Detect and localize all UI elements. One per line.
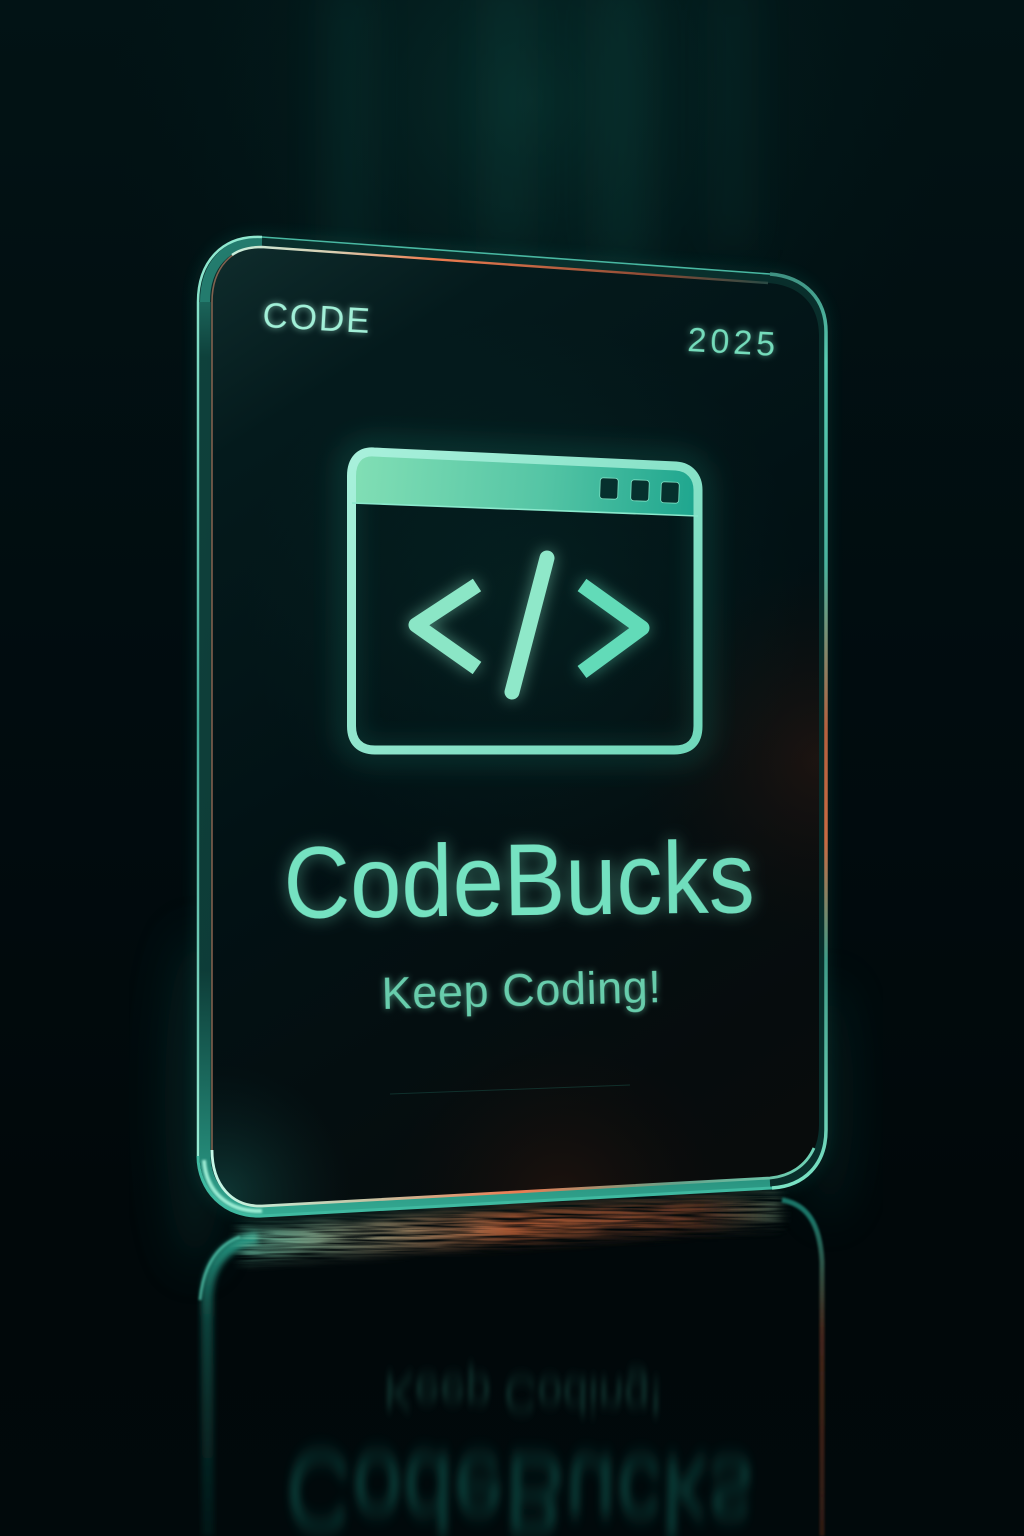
left and bottom glass band (205, 302, 770, 1211)
glass edge band (198, 237, 826, 1216)
window frame (352, 452, 698, 750)
floor reflection of card (200, 1200, 822, 1536)
outer rim highlights (198, 237, 262, 1156)
title bar (351, 452, 698, 516)
title: CodeBucks: CodeBucks (283, 820, 755, 940)
tagline: Keep Coding! (381, 961, 662, 1019)
code symbol (416, 558, 642, 692)
inner rim highlights (212, 247, 262, 1150)
window glow (347, 448, 702, 754)
label: CODE: CODE (262, 296, 373, 341)
reflected glass edge (200, 1200, 822, 1536)
icon: code window (347, 448, 702, 754)
card body (212, 247, 819, 1206)
reflected tagline: Keep Coding! (383, 1362, 663, 1425)
glass card (198, 237, 826, 1216)
label: 2025: 2025 (687, 321, 780, 364)
faint line under tagline (390, 1085, 630, 1094)
window controls (600, 478, 679, 503)
card outer glow (198, 237, 826, 1216)
